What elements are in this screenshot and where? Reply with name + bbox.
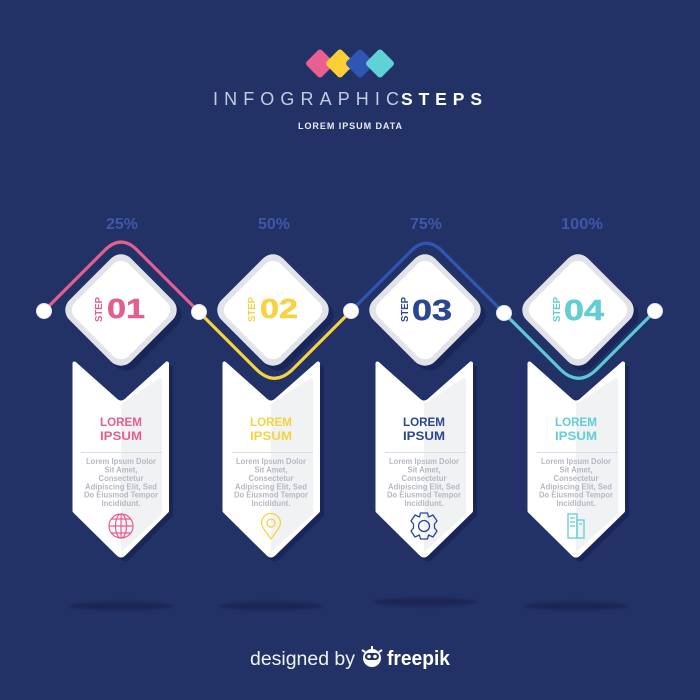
footer credit: designed by <box>250 648 355 670</box>
footer credit: freepik <box>387 648 451 670</box>
icon: location pin <box>262 514 280 539</box>
title: INFOGRAPHIC <box>213 89 399 109</box>
card 3: Lorem Ipsum Dolor <box>389 457 459 466</box>
title: STEPS <box>401 89 482 109</box>
card 3: Sit Amet, <box>408 466 440 474</box>
ground shadows <box>69 598 628 610</box>
step 1 diamond: 01 <box>107 293 145 324</box>
card 2: Consectetur <box>248 474 294 483</box>
icon: freepik mascot <box>362 646 382 667</box>
card 1: Adipiscing Elit, Sed <box>85 482 157 492</box>
card 1: Consectetur <box>98 474 144 483</box>
step 2 diamond: STEP <box>246 297 258 322</box>
card 2: LOREM <box>250 417 292 429</box>
card 3: Adipiscing Elit, Sed <box>388 482 460 492</box>
card 4: Lorem Ipsum Dolor <box>541 457 611 466</box>
step 1 diamond: STEP <box>93 297 105 322</box>
step 2 diamond: 02 <box>260 293 298 324</box>
card 4: Consectetur <box>554 474 598 483</box>
step 4 diamond: 04 <box>564 295 604 327</box>
card 1: Do Eiusmod Tempor <box>84 490 158 500</box>
step 4 diamond <box>516 248 645 377</box>
card 4: Do Eiusmod Tempor <box>539 490 613 500</box>
card 3: IPSUM <box>403 431 445 443</box>
card 1: Sit Amet, <box>104 466 138 474</box>
card 4: Incididunt. <box>556 499 596 508</box>
title <box>213 89 482 109</box>
card 1 <box>74 364 171 560</box>
icon: buildings <box>568 514 584 538</box>
percent labels <box>106 216 603 233</box>
subtitle: LOREM IPSUM DATA <box>298 121 402 131</box>
card 2: Adipiscing Elit, Sed <box>235 482 307 492</box>
percent labels: 25% <box>106 216 138 233</box>
card 3 <box>378 364 475 560</box>
icon: globe <box>109 514 133 538</box>
card 2 <box>224 364 322 560</box>
logo: four diamonds <box>305 48 395 79</box>
card 1: IPSUM <box>100 431 142 443</box>
card 3: Incididunt. <box>404 499 444 508</box>
percent labels: 100% <box>561 216 603 233</box>
card 4: IPSUM <box>555 431 597 443</box>
card 1: Lorem Ipsum Dolor <box>86 457 156 466</box>
card 2: IPSUM <box>250 431 292 443</box>
card 2: Sit Amet, <box>254 466 288 474</box>
card 1: Incididunt. <box>102 499 140 508</box>
card 2: Lorem Ipsum Dolor <box>236 457 306 466</box>
icon: gear <box>411 513 437 539</box>
step 3 diamond <box>363 248 492 377</box>
step 4 diamond: STEP <box>551 297 563 322</box>
percent labels: 50% <box>258 216 290 233</box>
card 2: Incididunt. <box>252 499 290 508</box>
card 3: Consectetur <box>402 474 446 483</box>
connector dots <box>36 304 662 320</box>
card 4: Sit Amet, <box>560 466 592 474</box>
card 1: LOREM <box>100 417 142 429</box>
card 2: Do Eiusmod Tempor <box>234 490 308 500</box>
card 4 <box>530 364 627 560</box>
step 3 diamond: STEP <box>399 297 411 322</box>
percent labels: 75% <box>410 216 442 233</box>
connecting lines <box>44 242 655 378</box>
footer credit <box>250 646 451 670</box>
card 4: Adipiscing Elit, Sed <box>540 482 612 492</box>
step 1 diamond <box>59 248 188 377</box>
card 4: LOREM <box>555 417 597 429</box>
step 2 diamond <box>211 248 340 377</box>
step 3 diamond: 03 <box>412 295 452 327</box>
card 3: LOREM <box>403 417 445 429</box>
card 3: Do Eiusmod Tempor <box>387 490 461 500</box>
